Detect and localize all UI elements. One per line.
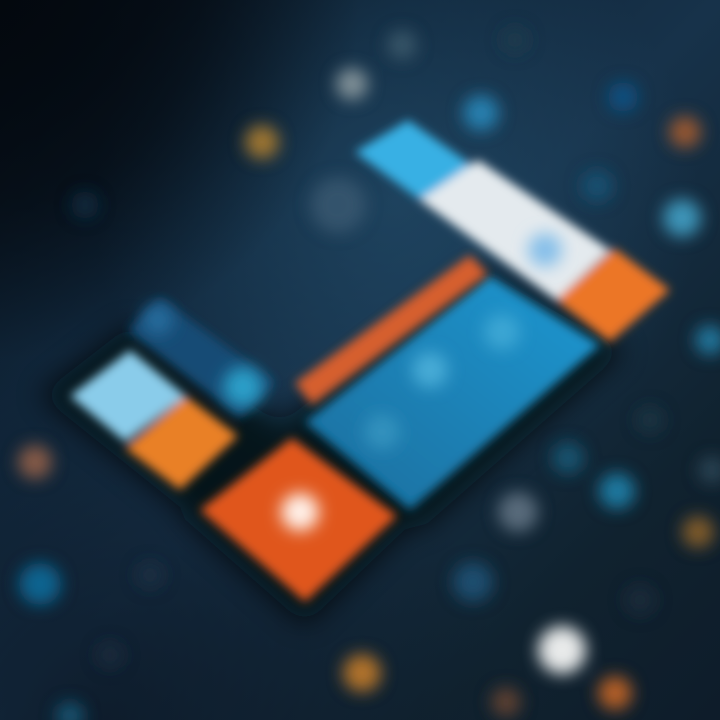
block shadows (40, 270, 625, 625)
pale blue tile (70, 350, 186, 442)
bar: orange stripe (295, 255, 488, 405)
panel: large blue block (305, 276, 600, 510)
icon: blue dot on white tile (528, 233, 562, 267)
dark blue tile (128, 298, 275, 418)
light blue tile (355, 120, 472, 200)
panel: upper block row (355, 120, 670, 342)
blue block highlights (364, 314, 520, 450)
panel: orange-red square (200, 438, 397, 602)
left block highlights (143, 305, 263, 407)
white tile (420, 160, 610, 300)
icon: white dot (281, 493, 319, 531)
orange tile (125, 396, 238, 490)
panel: left block group (70, 298, 275, 490)
orange tile (556, 248, 670, 342)
